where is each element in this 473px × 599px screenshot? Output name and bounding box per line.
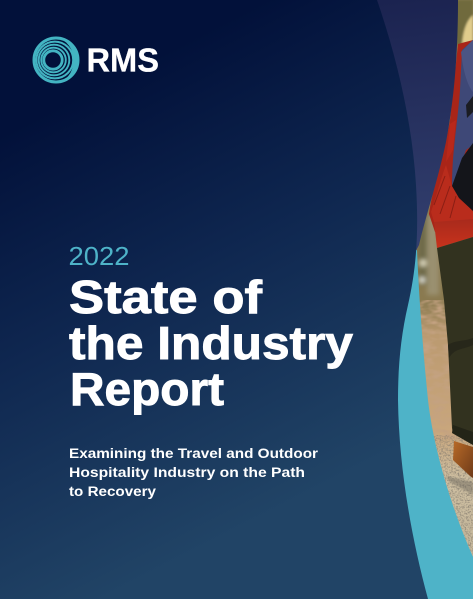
year: 2022 bbox=[68, 243, 130, 271]
subtitle: Examining the Travel and Outdoor bbox=[69, 446, 319, 461]
title: the Industry bbox=[69, 317, 353, 369]
teal curve bbox=[390, 250, 473, 599]
subtitle bbox=[69, 446, 319, 499]
logo bbox=[34, 38, 159, 82]
backpack bbox=[452, 40, 473, 211]
translucent navy curve bbox=[370, 0, 458, 262]
path blotches bbox=[420, 300, 450, 402]
gravel texture bbox=[434, 435, 473, 556]
title: State of bbox=[69, 271, 263, 323]
logo mark: concentric teal rings bbox=[34, 38, 78, 82]
hair bbox=[457, 0, 473, 46]
subtitle: Hospitality Industry on the Path bbox=[69, 465, 305, 480]
background: photo of hiker bbox=[416, 0, 473, 557]
title: Report bbox=[70, 363, 224, 415]
title bbox=[69, 271, 353, 415]
gravel shadow bbox=[445, 476, 473, 495]
blurred trees bbox=[418, 215, 439, 295]
subtitle: to Recovery bbox=[69, 484, 157, 499]
logo wordmark: RMS bbox=[86, 42, 159, 78]
jacket bbox=[429, 40, 473, 248]
shoe bbox=[453, 441, 473, 478]
trousers bbox=[437, 237, 473, 445]
